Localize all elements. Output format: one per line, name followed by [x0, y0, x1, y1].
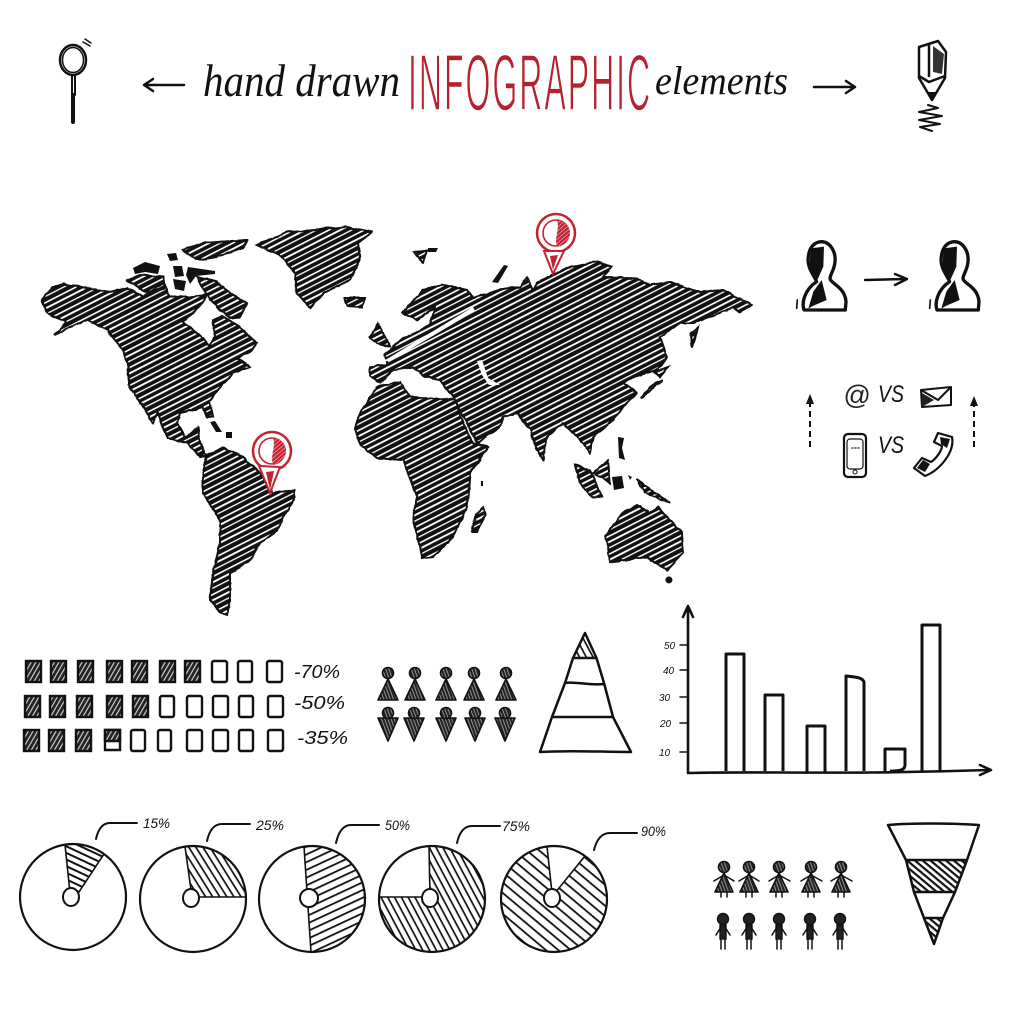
y axis labels: 10 — [659, 748, 671, 759]
map: white strip through europe and asia — [382, 307, 475, 362]
pictogram: upward triangle people — [378, 668, 516, 700]
pictogram: men — [716, 914, 847, 949]
callout 15 percent — [96, 815, 170, 839]
title — [203, 38, 788, 127]
pie chart 25 percent — [140, 846, 246, 952]
australia — [605, 505, 683, 570]
pictogram: women — [714, 862, 852, 897]
funnel chart — [888, 824, 979, 944]
map: caspian sea — [477, 360, 500, 385]
title: hand drawn: hand drawn — [203, 56, 400, 106]
callout 50 percent — [336, 817, 410, 843]
pin: south america — [253, 432, 291, 493]
arrow: dashed left — [809, 400, 811, 447]
callout 50 percent: 50% — [385, 817, 410, 833]
icon: person right — [930, 242, 979, 310]
icon: smartphone — [844, 434, 866, 477]
africa — [355, 382, 488, 558]
map hatching — [30, 220, 760, 620]
callout 75 percent — [457, 818, 530, 843]
title: infographic: INFOGRAPHIC — [408, 38, 652, 127]
icon: person left — [797, 242, 846, 310]
british isles — [370, 323, 390, 347]
progress squares: row 50 percent — [25, 696, 283, 717]
callout 75 percent: 75% — [502, 818, 530, 834]
callout 90 percent — [594, 823, 666, 850]
icon: telephone handset — [914, 433, 952, 476]
progress squares: row 70 percent — [26, 661, 282, 682]
greenland — [257, 227, 372, 308]
tick marks — [680, 645, 687, 752]
north america — [42, 283, 257, 457]
madagascar — [472, 507, 485, 532]
label: vs bottom: VS — [878, 432, 904, 459]
bar chart — [659, 606, 991, 775]
arrow: dashed right — [973, 402, 975, 447]
arrowhead: dashed right — [970, 396, 978, 406]
label: 50 percent: -50% — [294, 693, 345, 713]
arrow: person to person — [865, 274, 907, 285]
arrow: right — [814, 81, 855, 93]
bars — [726, 625, 940, 772]
title: elements: elements — [655, 58, 788, 103]
icon: envelope — [921, 387, 951, 407]
pyramid chart — [540, 633, 631, 752]
callout 25 percent: 25% — [255, 817, 284, 833]
south america — [203, 448, 295, 615]
arctic islands — [127, 240, 247, 318]
icon: magnifying glass — [60, 39, 91, 122]
label: vs top: VS — [878, 381, 904, 408]
icon: pencil — [919, 41, 946, 131]
y axis labels: 40 — [663, 666, 675, 677]
world map — [42, 227, 752, 615]
y axis labels: 50 — [664, 641, 676, 652]
iceland — [345, 298, 365, 307]
icon: at sign: @ — [843, 380, 870, 410]
y axis labels — [659, 641, 676, 759]
pie chart 15 percent — [20, 844, 126, 950]
pictogram: downward triangle people — [378, 708, 515, 741]
pie chart 90 percent — [501, 846, 607, 952]
callout 15 percent: 15% — [143, 815, 170, 831]
callout 25 percent — [207, 817, 284, 841]
callout 90 percent: 90% — [641, 823, 666, 839]
arrow: left — [144, 79, 184, 91]
pie chart 75 percent — [379, 846, 485, 952]
map details: solid islands — [133, 248, 672, 583]
y axis labels: 20 — [659, 719, 672, 730]
pie chart 50 percent — [259, 846, 365, 952]
y axis labels: 30 — [659, 693, 671, 704]
label: 70 percent: -70% — [294, 662, 340, 682]
pin: siberia — [537, 214, 575, 274]
label: 35 percent: -35% — [297, 728, 348, 748]
axes — [683, 606, 991, 775]
progress squares: row 35 percent — [24, 730, 283, 751]
arrowhead: dashed left — [806, 394, 814, 404]
southeast asia islands — [413, 251, 698, 503]
eurasia — [370, 262, 752, 460]
